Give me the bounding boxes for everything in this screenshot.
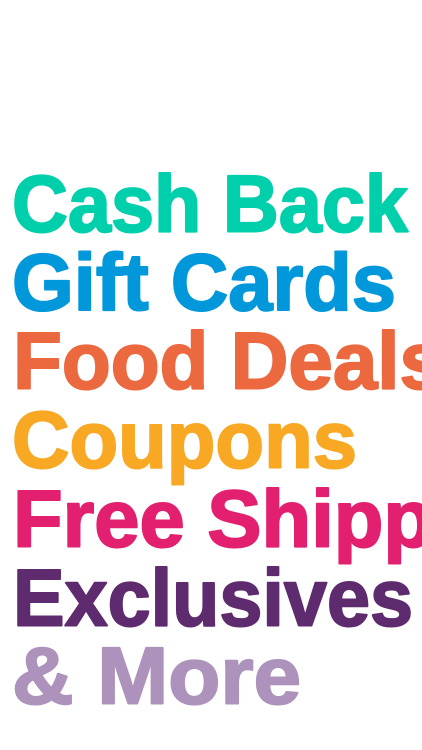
line: Gift Cards: Gift Cards <box>12 238 396 328</box>
line: Cash Back: Cash Back <box>12 160 409 250</box>
line: Exclusives: Exclusives <box>13 554 413 644</box>
line: & More: & More <box>12 632 301 722</box>
line: Coupons: Coupons <box>12 396 357 486</box>
